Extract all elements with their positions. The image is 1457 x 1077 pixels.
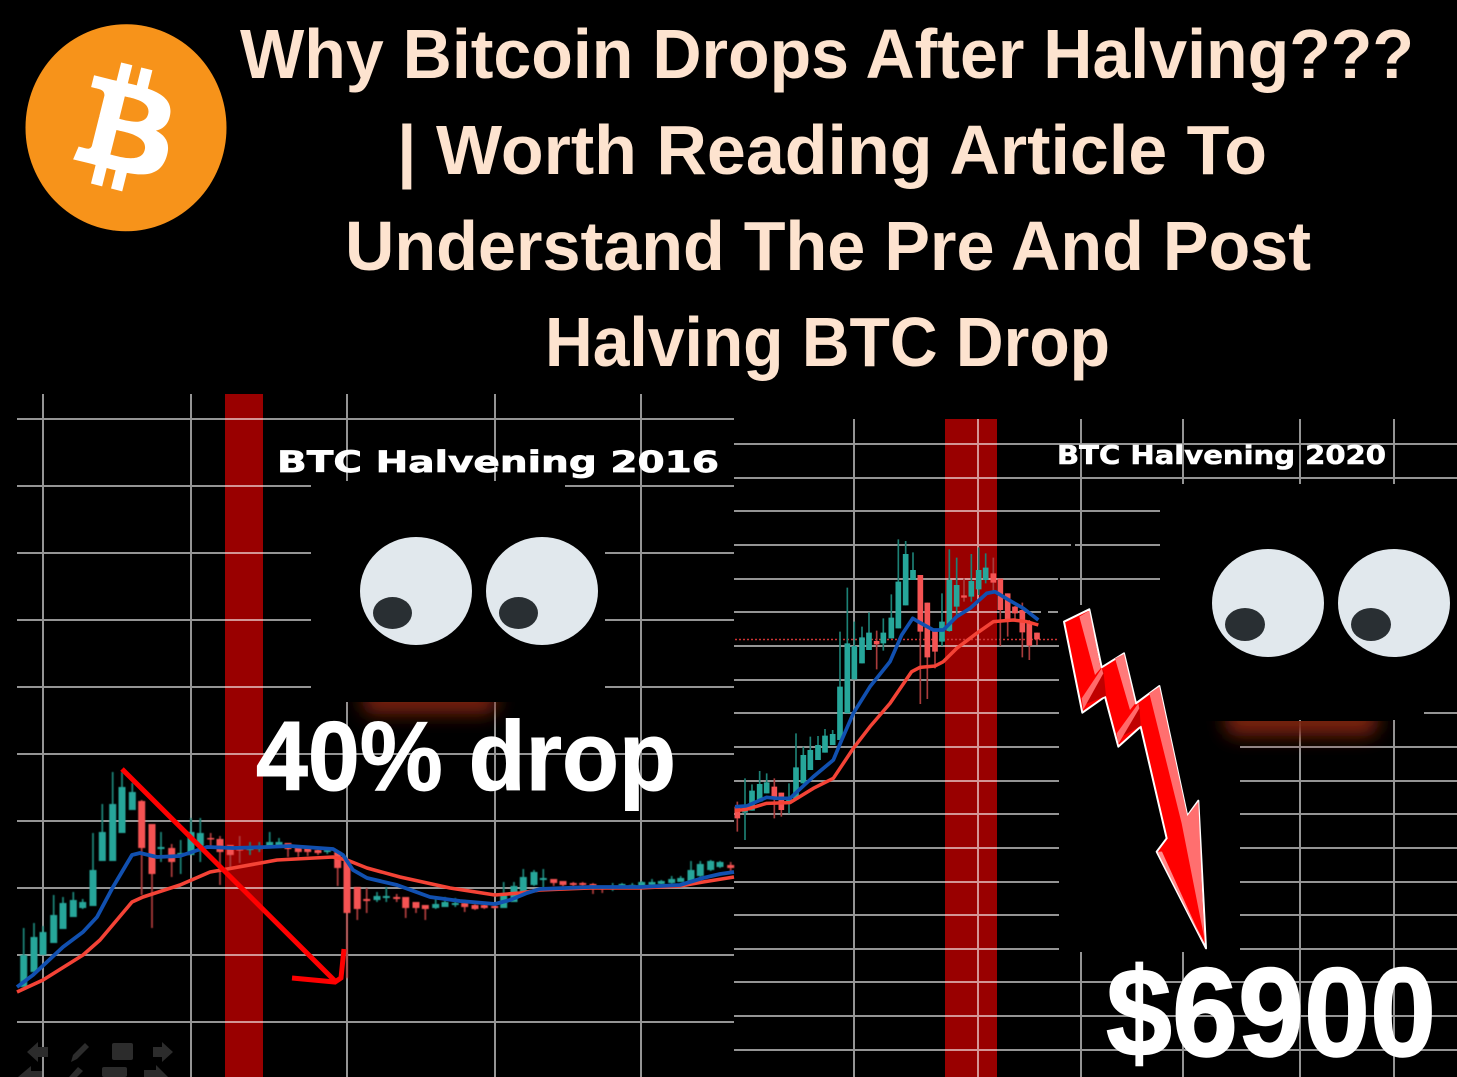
- halving band 2016: [225, 394, 263, 1077]
- lightning down arrow: [1064, 609, 1206, 948]
- icon: mouth glow 2020: [1225, 704, 1378, 736]
- panel: 2020 halving chart: [734, 419, 1457, 1077]
- price dotted line: [735, 638, 1058, 640]
- blue moving average 2020: [735, 592, 1038, 807]
- title: Why Bitcoin Drops After Halving???: [240, 15, 1414, 93]
- bitcoin logo: [26, 24, 226, 231]
- title: Halving BTC Drop: [545, 303, 1110, 381]
- blue moving average 2016: [17, 846, 734, 987]
- red candles 2020: [737, 558, 1037, 832]
- red moving average 2020: [735, 620, 1038, 811]
- title: [240, 15, 1414, 381]
- green candles 2016: [24, 772, 720, 987]
- heading: BTC Halvening 2016: BTC Halvening 2016: [277, 445, 719, 479]
- icon: eyes 2020: [1212, 549, 1450, 657]
- down arrow 2016: [122, 769, 344, 982]
- callout: 40% drop: 40% drop: [256, 701, 676, 811]
- chart toolbar icons: [18, 1042, 173, 1077]
- green candles 2020: [745, 539, 986, 840]
- halving band 2020: [945, 419, 997, 1077]
- icon: eyes 2016: [360, 537, 598, 645]
- red moving average 2016: [17, 857, 734, 992]
- title: | Worth Reading Article To: [397, 111, 1267, 190]
- heading: BTC Halvening 2020: BTC Halvening 2020: [1057, 441, 1386, 471]
- panel: 2016 halving chart: [17, 394, 734, 1077]
- red candles 2016: [142, 800, 731, 978]
- icon: mouth glow 2016: [362, 686, 497, 714]
- title: Understand The Pre And Post: [345, 207, 1311, 285]
